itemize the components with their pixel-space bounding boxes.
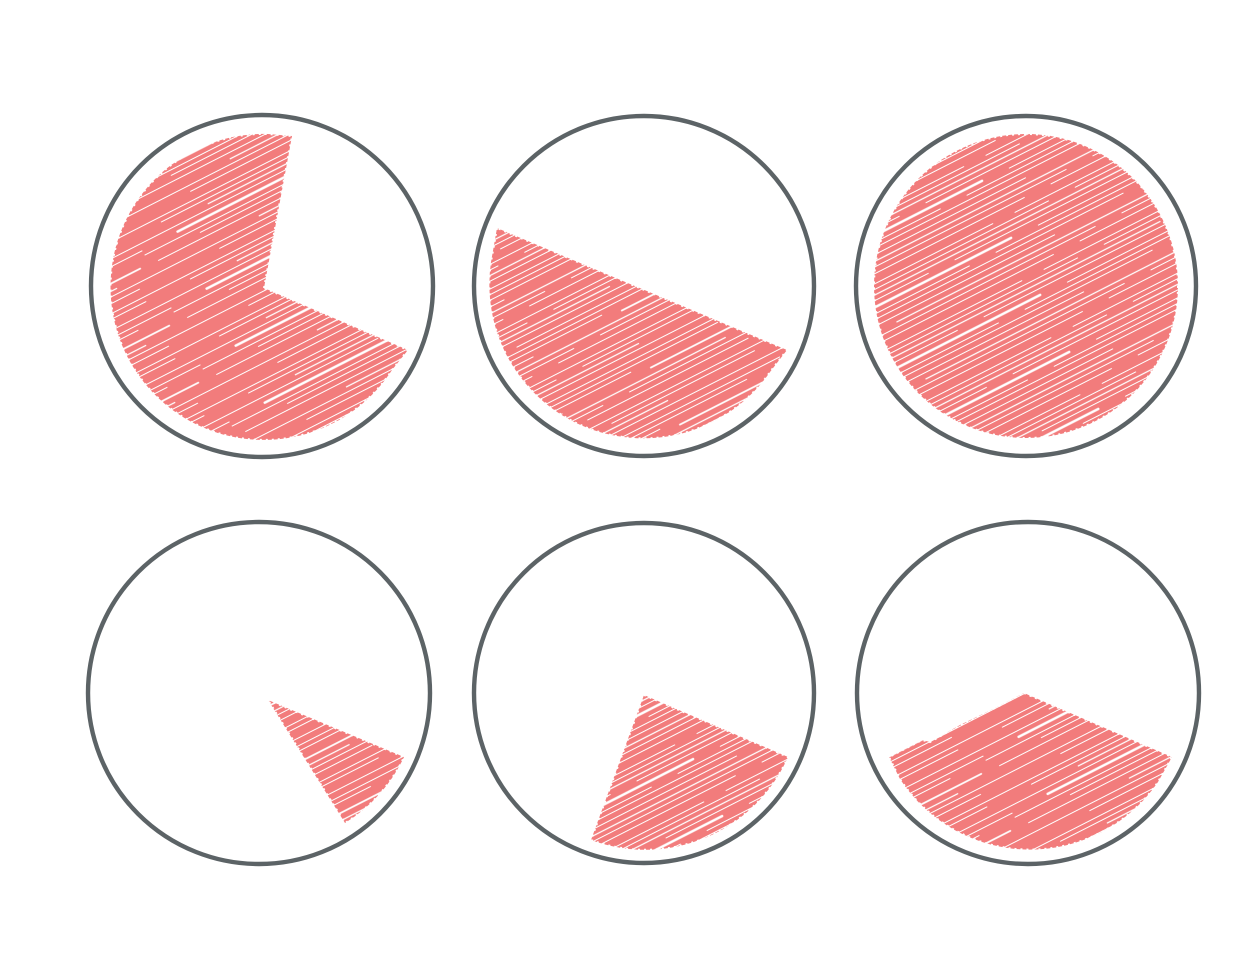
ring 4 [88, 522, 430, 864]
scribble wedge 3 [874, 134, 1178, 438]
ring 2 [474, 116, 814, 456]
scribble wedge 5 [591, 695, 788, 850]
ring 5 [474, 523, 814, 863]
chart 6: wide slice [857, 522, 1199, 864]
scribble wedge 6 [889, 693, 1172, 850]
ring 1 [91, 115, 433, 457]
scribble wedge 4 [268, 700, 404, 823]
chart 4: narrow slice [88, 522, 430, 864]
ring 6 [857, 522, 1199, 864]
chart 1: large pie, about two thirds filled [91, 115, 433, 457]
ring 3 [856, 116, 1196, 456]
chart 3: full pie [856, 116, 1196, 456]
chart 5: medium slice [474, 523, 814, 863]
scribble wedge 2 [489, 228, 787, 438]
chart 2: half pie [474, 116, 814, 456]
scribble wedge 1 [111, 134, 408, 440]
